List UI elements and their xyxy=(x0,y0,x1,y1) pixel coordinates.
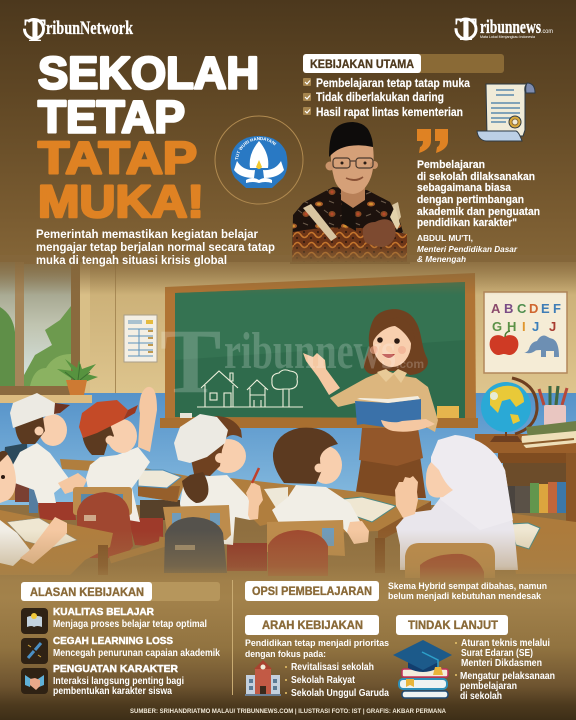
quote: di sekolah dilaksanakan xyxy=(417,171,535,183)
watermark: T xyxy=(160,310,221,412)
reason 1: KUALITAS BELAJAR xyxy=(53,607,155,618)
reason 1: Menjaga proses belajar tetap optimal xyxy=(53,619,207,630)
icon: graduation cap and books xyxy=(393,640,452,698)
blue lower wall xyxy=(0,393,576,505)
logo: Tribun Network: T xyxy=(24,13,46,49)
student 4: brown hair xyxy=(272,428,369,544)
chalkboard xyxy=(160,273,478,428)
alphabet poster: E xyxy=(541,301,550,316)
quote: Menteri Pendidikan Dasar xyxy=(417,244,518,254)
glasses xyxy=(333,158,373,168)
header: tindak lanjut xyxy=(396,615,508,635)
watermark: ribunnews xyxy=(224,323,396,380)
quote: dengan pertimbangan xyxy=(417,194,524,206)
header: opsi pembelajaran xyxy=(245,581,379,601)
illustration: classroom scene xyxy=(0,262,576,590)
reason 1 xyxy=(53,607,207,630)
chalk drawing: houses and tree xyxy=(197,370,303,407)
reason 3: Interaksi langsung penting bagi xyxy=(53,676,184,687)
logo: Tribunnews xyxy=(455,12,553,48)
logo: Tribunnews: .com xyxy=(541,28,553,35)
subtitle: mengajar tetap berjalan normal secara tatap xyxy=(36,240,275,254)
list: tindak lanjut: Surat Edaran (SE) xyxy=(461,648,533,659)
elephant xyxy=(524,336,559,357)
quote xyxy=(417,159,540,264)
globe xyxy=(481,378,537,441)
list: fokus: Sekolah Unggul Garuda xyxy=(291,688,389,699)
reason 2: Mencegah penurunan capaian akademik xyxy=(53,648,220,659)
quote: & Menengah xyxy=(417,254,466,264)
chair and backpack at student 4 xyxy=(267,520,345,576)
neck and face xyxy=(341,183,365,208)
list: tindak lanjut: Menteri Dikdasmen xyxy=(461,658,542,669)
header: tindak lanjut: TINDAK LANJUT xyxy=(408,618,499,632)
wall chart xyxy=(124,315,157,362)
pointing arm xyxy=(303,353,340,395)
student 3: ponytail xyxy=(174,414,267,571)
chair and backpack at hijab student xyxy=(405,543,495,582)
alphabet poster: I xyxy=(522,319,526,334)
hair xyxy=(364,309,428,375)
subtitle: muka di tengah situasi krisis global xyxy=(36,253,227,267)
alphabet poster: B xyxy=(504,301,513,316)
list: fokus: Revitalisasi sekolah xyxy=(291,662,374,673)
alphabet poster: J xyxy=(532,319,539,334)
header: arah kebijakan xyxy=(245,615,379,635)
logo: Tut Wuri Handayani xyxy=(214,116,304,204)
list: tindak lanjut: Aturan teknis melalui xyxy=(461,638,550,649)
checklist: Pembelajaran tetap tatap muka xyxy=(316,76,470,90)
quote: akademik dan penguatan xyxy=(417,206,540,218)
header: arah kebijakan: ARAH KEBIJAKAN xyxy=(262,618,363,632)
list: fokus xyxy=(285,662,389,699)
icon: document scroll xyxy=(477,83,535,141)
alphabet poster: A xyxy=(491,301,501,316)
checklist xyxy=(303,76,470,119)
fade at top of scene xyxy=(0,255,576,295)
title xyxy=(38,48,259,227)
watermark xyxy=(160,310,424,412)
section header: Kebijakan Utama: KEBIJAKAN UTAMA xyxy=(310,59,414,71)
panel: alasan kebijakan xyxy=(21,582,220,697)
quote: sebagaimana biasa xyxy=(417,182,512,194)
chair and grey backpack xyxy=(163,505,231,573)
icon: school building xyxy=(245,660,281,696)
quote: pendidikan karakter" xyxy=(417,217,517,229)
quote: Pembelajaran xyxy=(417,159,485,171)
subtitle: Pemerintah memastikan kegiatan belajar xyxy=(36,227,258,241)
title: TATAP xyxy=(38,132,197,184)
title: MUKA! xyxy=(38,176,204,227)
logo: Tribunnews: ribunnews xyxy=(480,17,541,38)
section header: Kebijakan Utama xyxy=(303,54,504,73)
reason 2: CEGAH LEARNING LOSS xyxy=(53,636,173,647)
apple xyxy=(490,335,518,355)
batik shirt xyxy=(292,187,407,262)
title: SEKOLAH xyxy=(38,48,259,98)
student: far left xyxy=(0,451,113,575)
panel: tindak lanjut xyxy=(393,615,555,702)
reason 3 xyxy=(53,664,184,697)
chair and red backpack xyxy=(73,487,163,560)
icon: book and bulb xyxy=(21,608,48,634)
portrait: Abdul Mu'ti xyxy=(290,122,410,264)
fist xyxy=(363,219,396,247)
source credit: SUMBER: SRIHANDRIATMO MALAU/ TRIBUNNEWS.COM | ILUSTRASI FOTO: IST | GRAFIS: AKBAR PERMANA xyxy=(130,708,446,715)
logo: Tribun Network: ribunNetwork xyxy=(46,18,133,39)
logo: Tribun Network xyxy=(24,13,133,49)
quote mark xyxy=(417,129,448,153)
peci hat xyxy=(329,122,373,157)
logo: Tut Wuri Handayani: TUT WURI HANDAYANI xyxy=(235,136,276,160)
list: tindak lanjut: di sekolah xyxy=(460,691,502,702)
text: prioritas: Pendidikan tetap menjadi prioritas xyxy=(245,638,389,649)
text: skema hybrid: belum menjadi kebutuhan mendesak xyxy=(388,591,542,602)
alphabet poster: G xyxy=(492,319,502,334)
back desks xyxy=(60,459,300,526)
divider xyxy=(232,580,233,695)
teacher's desk xyxy=(475,434,576,523)
student: hijab xyxy=(395,435,518,570)
alphabet poster: C xyxy=(517,301,527,316)
alphabet poster xyxy=(484,292,567,373)
title: TETAP xyxy=(38,92,185,142)
student 2: red cap, raised hand xyxy=(79,387,163,547)
list: tindak lanjut: pembelajaran xyxy=(460,681,517,692)
header: alasan kebijakan: ALASAN KEBIJAKAN xyxy=(30,585,144,599)
skirt xyxy=(355,428,426,498)
logo: Tribunnews: T xyxy=(455,12,477,48)
alphabet poster: J xyxy=(549,319,556,334)
header: opsi pembelajaran: OPSI PEMBELAJARAN xyxy=(252,584,372,598)
alphabet poster: H xyxy=(507,319,516,334)
plant xyxy=(57,359,98,395)
icon: chain xyxy=(21,638,48,664)
logo: Tribunnews: Mata Lokal Menjangkau Indonesia xyxy=(480,35,535,39)
header: alasan kebijakan xyxy=(21,582,220,601)
panel: arah kebijakan xyxy=(245,615,389,699)
bottom panel background xyxy=(0,530,576,720)
open book xyxy=(355,399,421,428)
alphabet poster: D xyxy=(529,301,538,316)
reason 3: pembentukan karakter siswa xyxy=(53,686,172,697)
list: fokus: Sekolah Rakyat xyxy=(291,675,356,686)
face xyxy=(373,321,411,367)
list: tindak lanjut xyxy=(455,638,555,702)
student desk with book right xyxy=(328,488,431,573)
watermark: .com xyxy=(396,357,424,371)
list: tindak lanjut: Mengatur pelaksanaan xyxy=(460,671,555,682)
text: skema hybrid xyxy=(388,581,547,602)
blouse xyxy=(330,371,438,432)
desk bottom right xyxy=(508,513,576,574)
wall xyxy=(0,262,576,494)
text: skema hybrid: Skema Hybrid sempat dibahas, namun xyxy=(388,581,547,592)
checklist: Tidak diberlakukan daring xyxy=(316,90,444,104)
pencil cup and books xyxy=(522,386,576,448)
subtitle xyxy=(36,227,275,267)
alphabet poster: F xyxy=(553,301,561,316)
checklist: Hasil rapat lintas kementerian xyxy=(316,105,463,119)
teacher xyxy=(303,309,438,498)
text: prioritas xyxy=(245,638,389,660)
window xyxy=(0,262,92,403)
quote: ABDUL MU'TI, xyxy=(417,233,473,243)
student 1: white cap xyxy=(3,393,87,520)
text: prioritas: dengan fokus pada: xyxy=(245,649,326,660)
reason 3: PENGUATAN KARAKTER xyxy=(53,664,179,675)
icon: handshake xyxy=(21,668,48,694)
reason 2 xyxy=(53,636,220,659)
